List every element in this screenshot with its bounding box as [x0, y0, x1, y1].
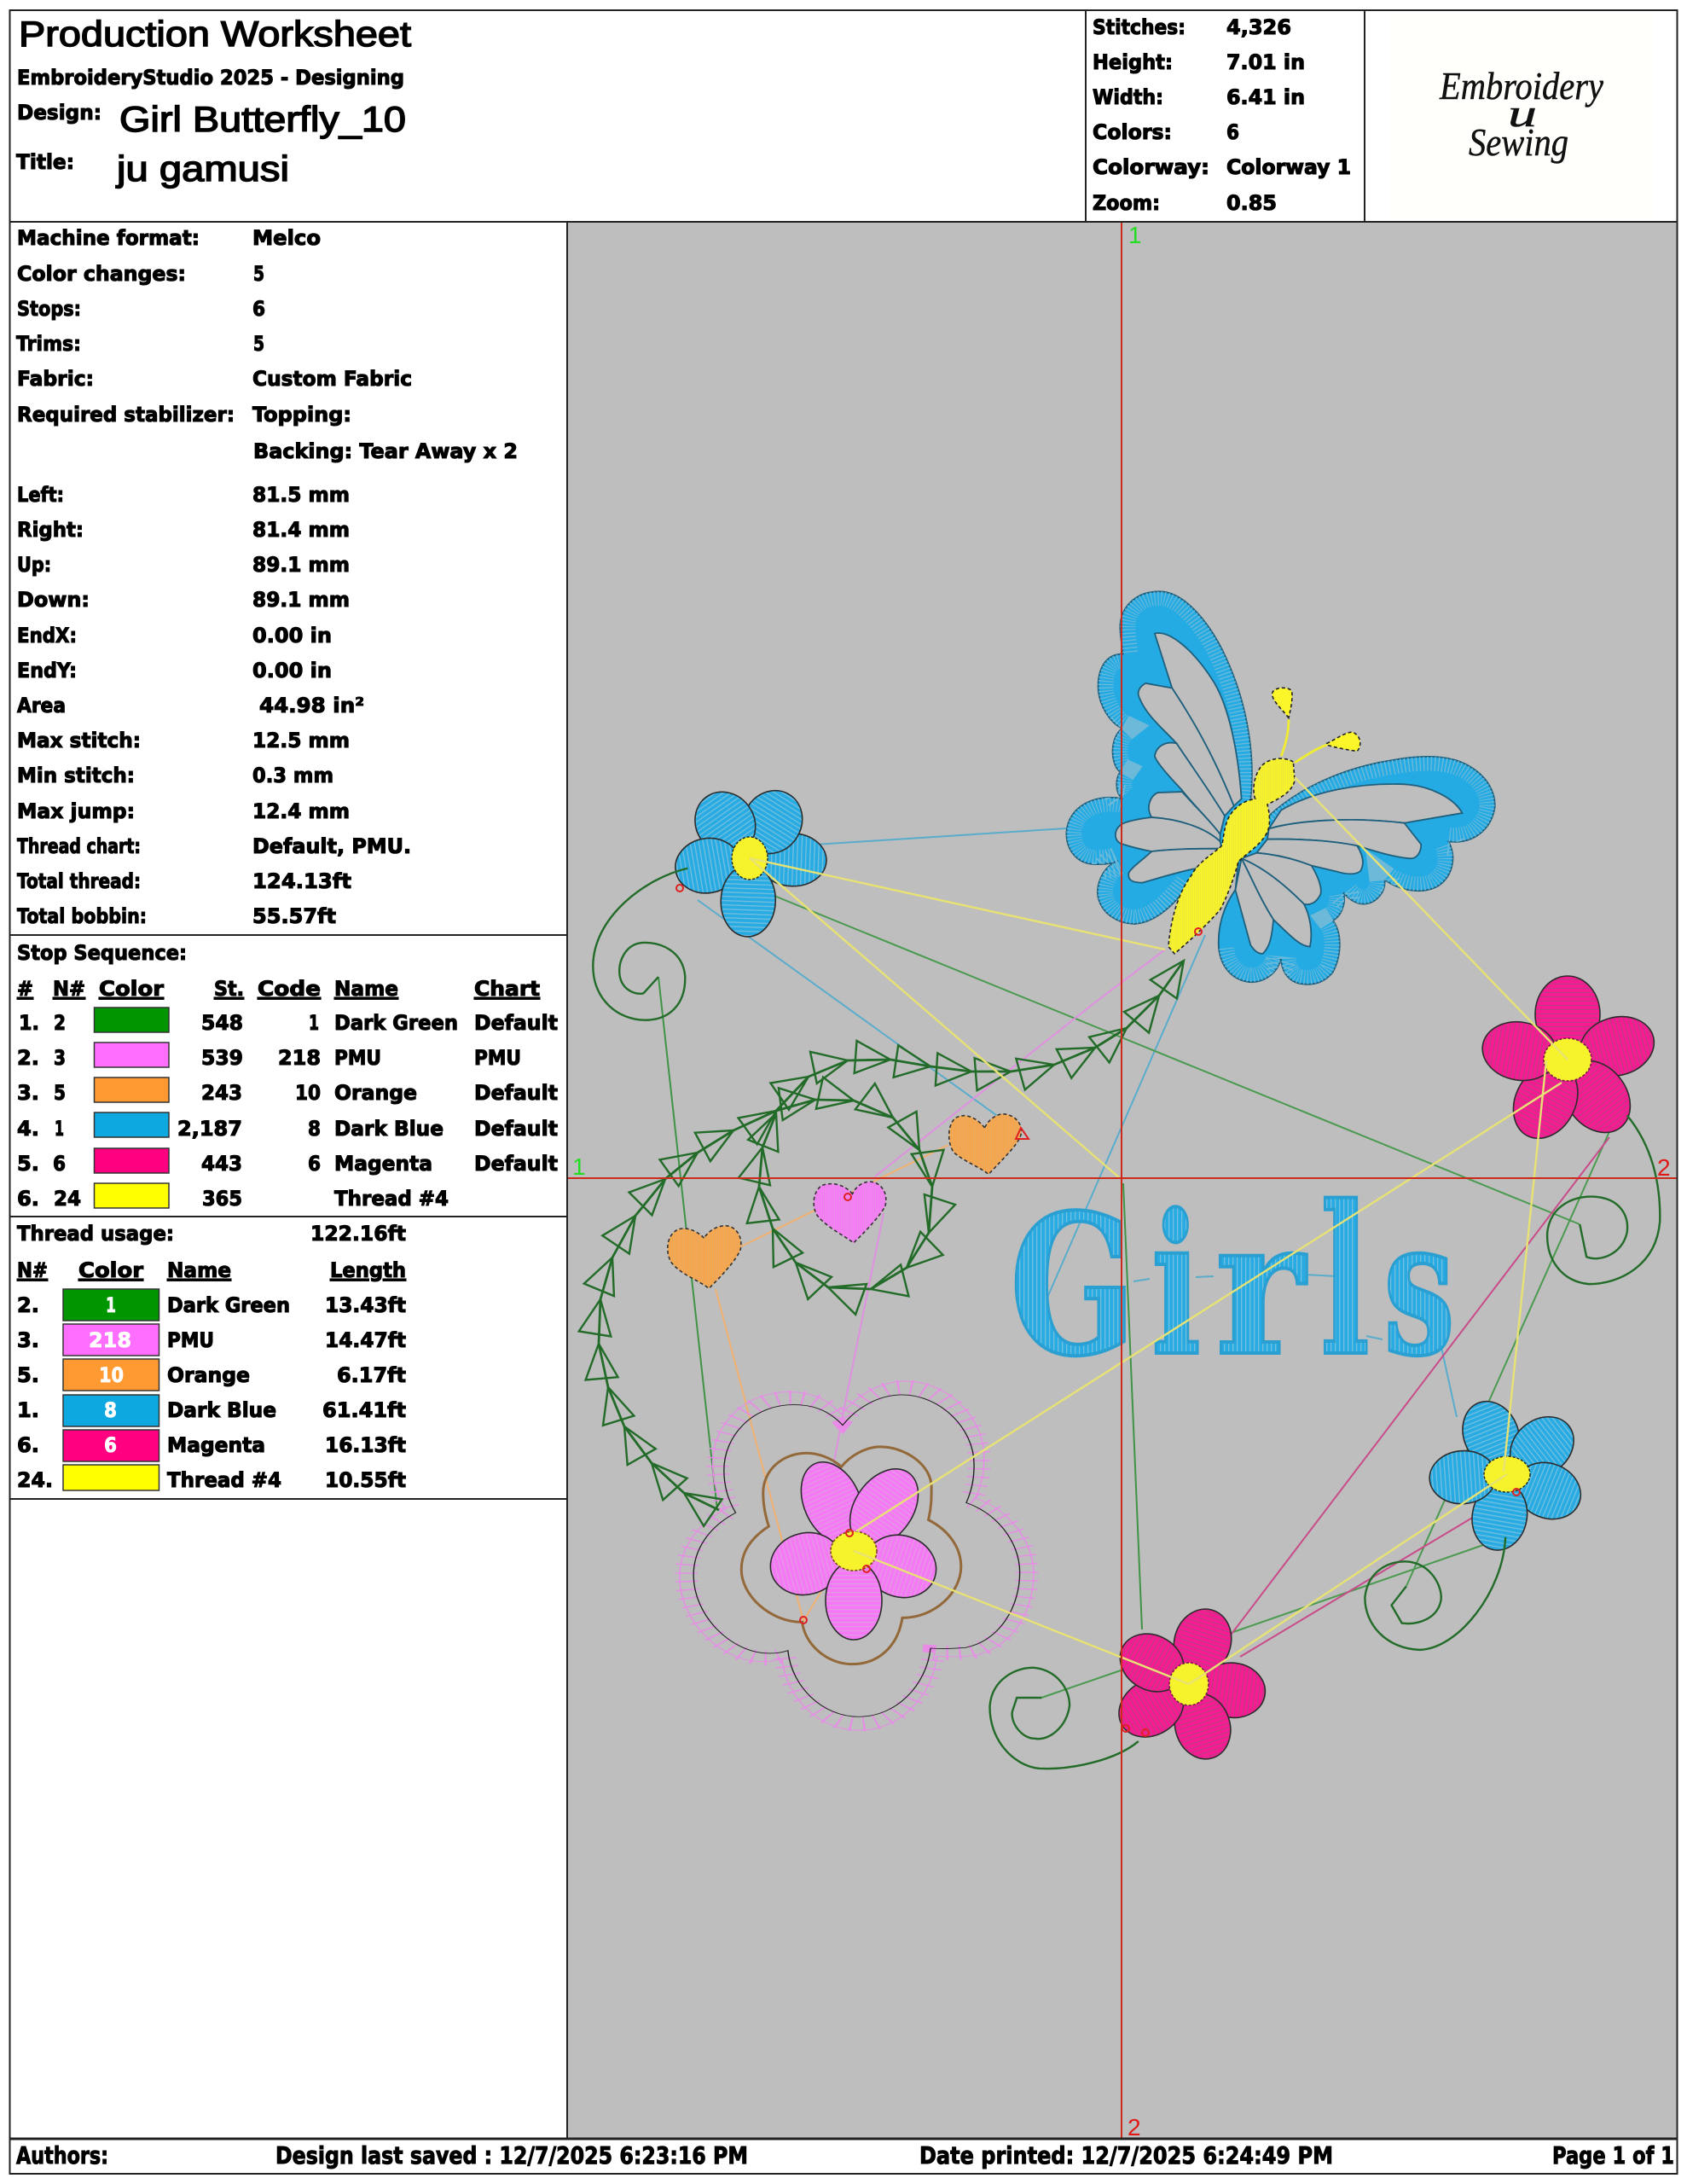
- row 2: 218: [278, 1046, 321, 1070]
- row 6: 24.: [17, 1468, 53, 1492]
- scalloped flower outlines: [680, 1381, 1034, 1730]
- row 1: 2.: [17, 1293, 39, 1317]
- row 5: Default: [474, 1152, 558, 1176]
- panel: machine settings: 6: [252, 297, 265, 321]
- row 3: 5.: [17, 1363, 39, 1387]
- row 4: Dark Blue: [167, 1398, 276, 1422]
- row 6: Thread #4: [334, 1187, 449, 1211]
- row 3: [17, 1077, 558, 1105]
- design name: Girl Butterfly_10: [119, 99, 406, 139]
- panel: machine settings: Required stabilizer:: [17, 403, 235, 427]
- row 6: Thread #4: [167, 1468, 281, 1492]
- row 5: [17, 1148, 558, 1176]
- row 6: 365: [202, 1187, 242, 1211]
- axis label red right: 2: [1657, 1154, 1671, 1181]
- row 5: Magenta: [334, 1152, 432, 1176]
- table header: Color: [78, 1258, 143, 1282]
- row 3: [17, 1359, 406, 1391]
- row 2: 2.: [17, 1046, 39, 1070]
- stop sequence heading: Stop Sequence:: [17, 941, 187, 965]
- heart: orange right: [949, 1114, 1021, 1175]
- panel: machine settings: 12.4 mm: [252, 799, 350, 823]
- green triangle vine: main chain: [599, 961, 1184, 1510]
- panel: machine settings: Left:: [17, 483, 64, 507]
- row 4: Default: [474, 1117, 558, 1141]
- row 1: 1.: [19, 1011, 39, 1035]
- row 3: 5: [54, 1081, 66, 1105]
- panel: machine settings: Machine format:: [17, 226, 200, 250]
- panel: machine settings: 89.1 mm: [252, 553, 350, 577]
- row 4: 2,187: [177, 1117, 242, 1141]
- panel: machine settings: Up:: [17, 553, 51, 577]
- logo: Embroidery n Sewing: u: [1508, 91, 1537, 135]
- row 2: [17, 1324, 406, 1356]
- row 5: 6: [53, 1152, 66, 1176]
- row 2: PMU: [474, 1046, 521, 1070]
- panel: machine settings: 81.4 mm: [252, 518, 350, 542]
- panel: machine settings: Color changes:: [17, 262, 186, 286]
- table header: [17, 1258, 406, 1282]
- panel: machine settings: EndY:: [17, 659, 77, 682]
- thread usage heading: Thread usage:: [17, 1222, 174, 1246]
- table header: Name: [167, 1258, 231, 1282]
- row 3: Orange: [167, 1363, 250, 1387]
- panel: thread usage table: [17, 1222, 406, 1492]
- panel: machine settings: 124.13ft: [252, 869, 351, 893]
- heading: Production Worksheet: [19, 14, 411, 54]
- row 1: Dark Green: [334, 1011, 458, 1035]
- flower: magenta bottom: [1108, 1601, 1269, 1766]
- green triangle vine: inner spiral: [759, 1100, 932, 1289]
- logo: Embroidery n Sewing: Embroidery: [1439, 64, 1604, 107]
- panel: machine settings: Fabric:: [17, 367, 94, 391]
- embroidered word: Girls: G: [1010, 1173, 1136, 1399]
- logo: Embroidery n Sewing: Sewing: [1469, 120, 1568, 164]
- row 2: PMU: [334, 1046, 381, 1070]
- row 1: 13.43ft: [325, 1293, 406, 1317]
- jump lines between stitched objects: [658, 816, 1618, 1698]
- header: design stats: 7.01 in: [1226, 50, 1305, 74]
- row 1: Default: [474, 1011, 558, 1035]
- row 6: [17, 1183, 449, 1211]
- row 1: [19, 1008, 558, 1035]
- hearts: [668, 1114, 1021, 1288]
- thread usage total: 122.16ft: [310, 1222, 406, 1246]
- row 4: 4.: [17, 1117, 39, 1141]
- butterfly body and antennae: [1168, 688, 1360, 954]
- row 4: [17, 1112, 558, 1141]
- embroidered word: Girls: s: [1383, 1176, 1455, 1397]
- logo: Embroidery n Sewing: [1390, 13, 1653, 219]
- butterfly right wings: [1219, 757, 1495, 985]
- header: title block: [16, 14, 411, 189]
- row 2: 3.: [17, 1328, 39, 1352]
- row 4: [17, 1395, 406, 1426]
- row 5: 6.: [17, 1433, 39, 1457]
- green spirals: right side and bottom: [990, 1115, 1660, 1769]
- row 2: 14.47ft: [325, 1328, 406, 1352]
- row 3: Orange: [334, 1081, 417, 1105]
- row 5: 6: [308, 1152, 321, 1176]
- row 2: 539: [201, 1046, 243, 1070]
- row 5: 5.: [17, 1152, 39, 1176]
- embroidered word: Girls: r: [1215, 1176, 1307, 1397]
- row 5: 16.13ft: [325, 1433, 406, 1457]
- panel: machine settings: 5: [253, 332, 264, 356]
- header: design stats: 6: [1226, 120, 1239, 144]
- flower: magenta top right: [1478, 976, 1661, 1150]
- red start and end markers: [676, 885, 1520, 1736]
- row 1: 1: [106, 1293, 116, 1317]
- panel: machine settings: Area: [17, 694, 66, 717]
- design label: Design:: [17, 101, 101, 125]
- panel: machine settings: Total bobbin:: [17, 904, 147, 928]
- header: design stats: 0.85: [1226, 191, 1277, 215]
- panel: machine settings: 89.1 mm: [252, 588, 350, 612]
- table header: [17, 977, 540, 1001]
- orange outline: [741, 1447, 961, 1664]
- header: design stats: Colorway:: [1093, 155, 1209, 179]
- row 4: 1.: [17, 1398, 39, 1422]
- butterfly left wings: [1066, 591, 1252, 924]
- panel: machine settings: Custom Fabric: [252, 367, 412, 391]
- heart: pink: [814, 1182, 886, 1243]
- panel: machine settings: Stops:: [17, 297, 81, 321]
- header: design stats: Colors:: [1093, 120, 1172, 144]
- row 1: 1: [309, 1011, 319, 1035]
- software line: EmbroideryStudio 2025 - Designing: [17, 66, 404, 90]
- panel: machine settings: 0.00 in: [252, 659, 332, 682]
- row 4: Dark Blue: [334, 1117, 443, 1141]
- header: design stats: [1093, 15, 1351, 215]
- row 5: Magenta: [167, 1433, 265, 1457]
- panel: machine settings: Backing: Tear Away x 2: [253, 439, 518, 463]
- panel: machine settings: Right:: [17, 518, 84, 542]
- footer: Authors:: [16, 2141, 108, 2169]
- flower: blue lower right: [1428, 1393, 1589, 1554]
- header: design stats: 4,326: [1226, 15, 1291, 39]
- row 2: 3: [54, 1046, 66, 1070]
- row 4: 8: [104, 1398, 117, 1422]
- table header: N#: [17, 1258, 48, 1282]
- panel: machine settings: Max jump:: [17, 799, 135, 823]
- row 5: 6: [104, 1433, 117, 1457]
- panel: machine settings: 81.5 mm: [252, 483, 350, 507]
- heart: orange left: [668, 1226, 741, 1288]
- panel: machine settings: Down:: [17, 588, 90, 612]
- header: design stats: Width:: [1093, 85, 1163, 109]
- embroidered word: Girls: l: [1320, 1161, 1370, 1402]
- row 4: 8: [308, 1117, 321, 1141]
- row 2: 218: [89, 1328, 131, 1352]
- row 5: [17, 1430, 406, 1461]
- header: design stats: Zoom:: [1093, 191, 1160, 215]
- panel: machine settings: 0.00 in: [252, 624, 332, 648]
- panel: stop sequence table: [17, 941, 558, 1211]
- embroidered word: Girls: [1010, 1161, 1455, 1402]
- row 6: [17, 1465, 406, 1492]
- row 3: Default: [474, 1081, 558, 1105]
- table header: Chart: [474, 977, 540, 1001]
- table header: Name: [334, 977, 398, 1001]
- axis label red bottom: 2: [1128, 2114, 1141, 2140]
- row 3: 10: [295, 1081, 321, 1105]
- panel: machine settings: 12.5 mm: [252, 729, 350, 752]
- row 2: PMU: [167, 1328, 214, 1352]
- panel: machine settings: Trims:: [16, 332, 81, 356]
- row 4: 1: [55, 1117, 64, 1141]
- row 3: 10: [99, 1363, 124, 1387]
- panel: machine settings: EndX:: [17, 624, 77, 648]
- panel: machine settings: Default, PMU.: [252, 834, 411, 858]
- flower: blue top left: [671, 779, 827, 938]
- row 4: 61.41ft: [322, 1398, 406, 1422]
- panel: machine settings: Min stitch:: [17, 764, 135, 787]
- embroidered word: Girls: i: [1151, 1173, 1201, 1399]
- panel: machine settings: [16, 226, 518, 928]
- table header: N#: [53, 977, 85, 1001]
- row 1: 2: [54, 1011, 66, 1035]
- table header: St.: [214, 977, 244, 1001]
- table header: Code: [258, 977, 321, 1001]
- panel: machine settings: 55.57ft: [252, 904, 336, 928]
- panel: machine settings: 5: [253, 262, 264, 286]
- outer pink satin border: [680, 1381, 1034, 1730]
- panel: machine settings: Max stitch:: [17, 729, 141, 752]
- flower: pink centre: [763, 1452, 944, 1640]
- axis label green left: 1: [572, 1153, 586, 1180]
- row 3: 243: [201, 1081, 242, 1105]
- yellow jump lines: [750, 777, 1568, 1684]
- panel: machine settings: Melco: [252, 226, 321, 250]
- row 6: 10.55ft: [325, 1468, 406, 1492]
- row 5: 443: [201, 1152, 242, 1176]
- panel: machine settings: Topping:: [252, 403, 351, 427]
- header: design stats: Stitches:: [1093, 15, 1186, 39]
- row 1: [17, 1289, 406, 1321]
- header: design stats: Colorway 1: [1226, 155, 1351, 179]
- title value: ju gamusi: [115, 148, 289, 189]
- row 1: Dark Green: [167, 1293, 290, 1317]
- panel: machine settings: 0.3 mm: [252, 764, 333, 787]
- row 2: [17, 1043, 521, 1070]
- inner black outline: [693, 1395, 1020, 1716]
- title label: Title:: [16, 150, 74, 174]
- footer: Design last saved : 12/7/2025 6:23:16 PM: [275, 2141, 748, 2169]
- butterfly: [1066, 591, 1495, 985]
- header: design stats: 6.41 in: [1226, 85, 1305, 109]
- footer: Date printed: 12/7/2025 6:24:49 PM: [919, 2141, 1333, 2169]
- crosshair axes: [567, 222, 1677, 2140]
- row 1: 548: [201, 1011, 243, 1035]
- table header: Color: [99, 977, 164, 1001]
- green spiral: top left: [593, 868, 687, 1020]
- row 3: 6.17ft: [337, 1363, 406, 1387]
- footer: [16, 2141, 1674, 2169]
- panel: design canvas: [567, 222, 1677, 2140]
- panel: machine settings: Total thread:: [17, 869, 141, 893]
- row 6: 24: [54, 1187, 81, 1211]
- panel: machine settings: 44.98 in²: [259, 694, 364, 717]
- axis label green top: 1: [1128, 222, 1142, 248]
- table header: Length: [330, 1258, 406, 1282]
- row 6: 6.: [17, 1187, 39, 1211]
- panel: machine settings: Thread chart:: [17, 834, 141, 858]
- header: design stats: Height:: [1093, 50, 1173, 74]
- table header: #: [17, 977, 33, 1001]
- row 3: 3.: [17, 1081, 39, 1105]
